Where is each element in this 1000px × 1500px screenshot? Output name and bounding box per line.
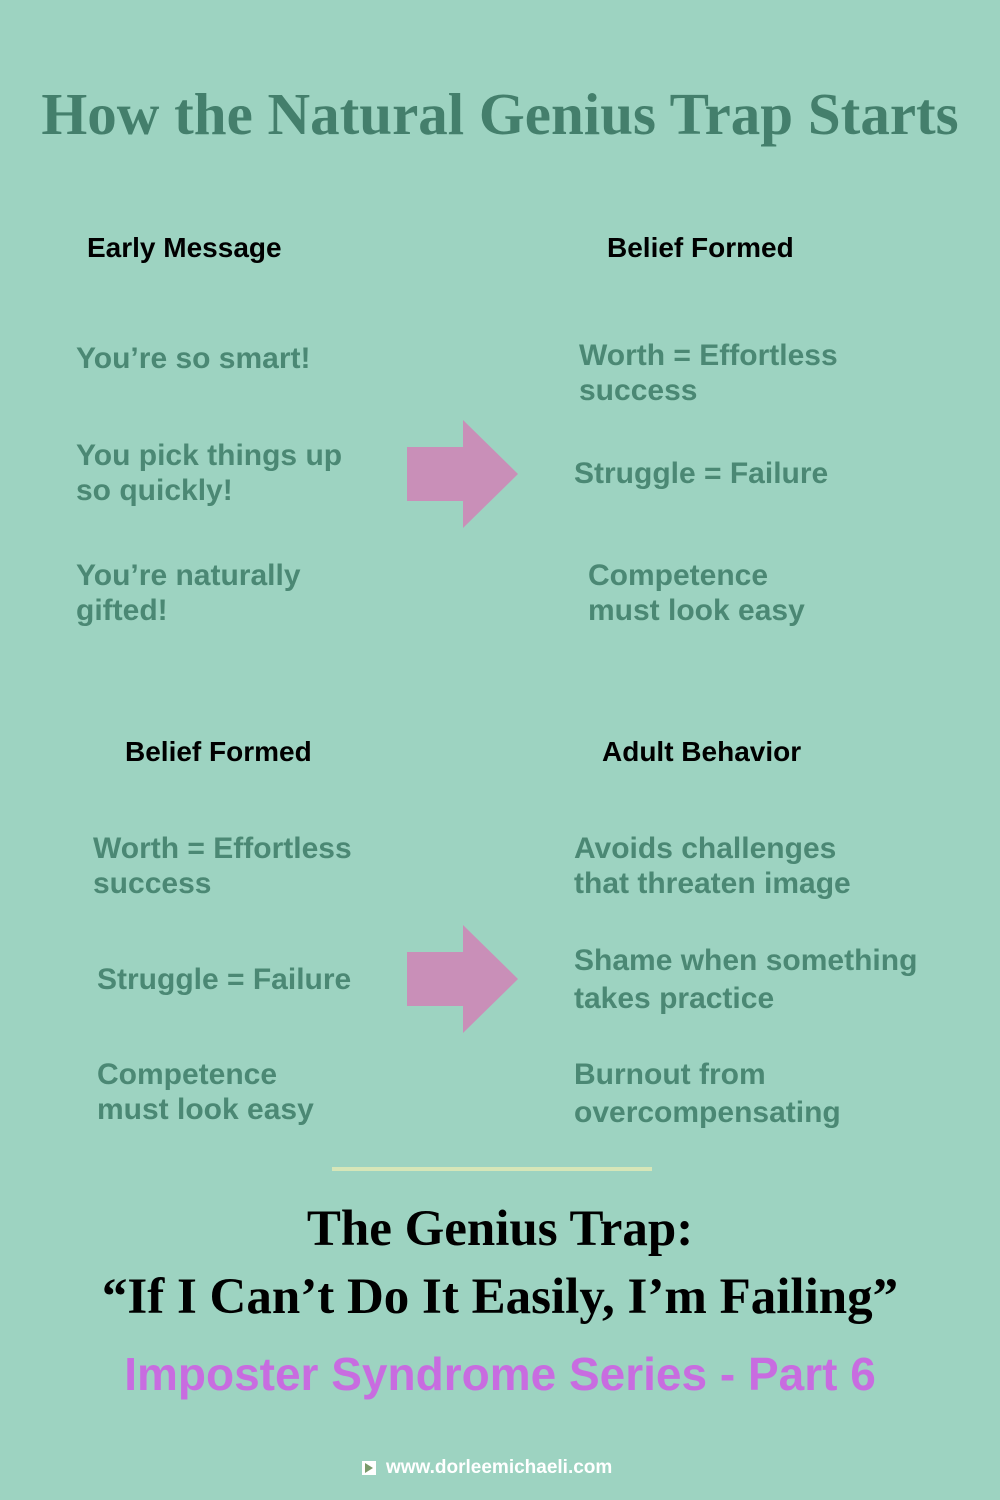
text: worth 2: Worth = Effortless — [93, 832, 352, 865]
text: burnout — [574, 1058, 841, 1129]
bottom title — [102, 1201, 898, 1325]
text: struggle 2: Struggle = Failure — [97, 963, 351, 996]
footer — [362, 1457, 612, 1478]
text: naturally gifted: You’re naturally — [76, 559, 301, 592]
divider — [332, 1167, 652, 1171]
text: competence — [588, 559, 805, 627]
text: pick up quickly: so quickly! — [76, 474, 233, 507]
text: avoids: Avoids challenges — [574, 832, 836, 865]
heading: adult behavior: Adult Behavior — [602, 736, 801, 767]
text: worth — [579, 339, 838, 407]
text: competence 2 — [97, 1058, 314, 1126]
text: so smart: You’re so smart! — [76, 342, 311, 375]
text: avoids: that threaten image — [574, 867, 851, 900]
text: naturally gifted — [76, 559, 301, 627]
heading: belief formed bottom: Belief Formed — [125, 736, 312, 767]
text: competence: must look easy — [588, 594, 805, 627]
text: competence: Competence — [588, 559, 768, 592]
text: struggle: Struggle = Failure — [574, 457, 828, 490]
text: pick up quickly — [76, 439, 342, 507]
text: worth 2 — [93, 832, 352, 900]
arrow 1 — [407, 420, 518, 528]
bottom title: The Genius Trap: — [307, 1201, 693, 1257]
footer text: www.dorleemichaeli.com — [386, 1457, 612, 1478]
text: pick up quickly: You pick things up — [76, 439, 342, 472]
icon: logo — [362, 1461, 376, 1475]
text: competence 2: must look easy — [97, 1093, 314, 1126]
text: shame: takes practice — [574, 982, 774, 1015]
subtitle: Imposter Syndrome Series - Part 6 — [124, 1348, 876, 1400]
arrow 2 — [407, 925, 518, 1033]
text: shame — [574, 944, 917, 1015]
title: How the Natural Genius Trap Starts — [41, 81, 959, 147]
text: burnout: Burnout from — [574, 1058, 766, 1091]
text: avoids — [574, 832, 851, 900]
heading: early message: Early Message — [87, 232, 282, 263]
bottom title: “If I Can’t Do It Easily, I’m Failing” — [102, 1269, 898, 1325]
text: competence 2: Competence — [97, 1058, 277, 1091]
text: burnout: overcompensating — [574, 1096, 841, 1129]
text: worth: Worth = Effortless — [579, 339, 838, 372]
heading: belief formed top: Belief Formed — [607, 232, 794, 263]
text: worth: success — [579, 374, 697, 407]
text: shame: Shame when something — [574, 944, 917, 977]
text: worth 2: success — [93, 867, 211, 900]
text: naturally gifted: gifted! — [76, 594, 168, 627]
